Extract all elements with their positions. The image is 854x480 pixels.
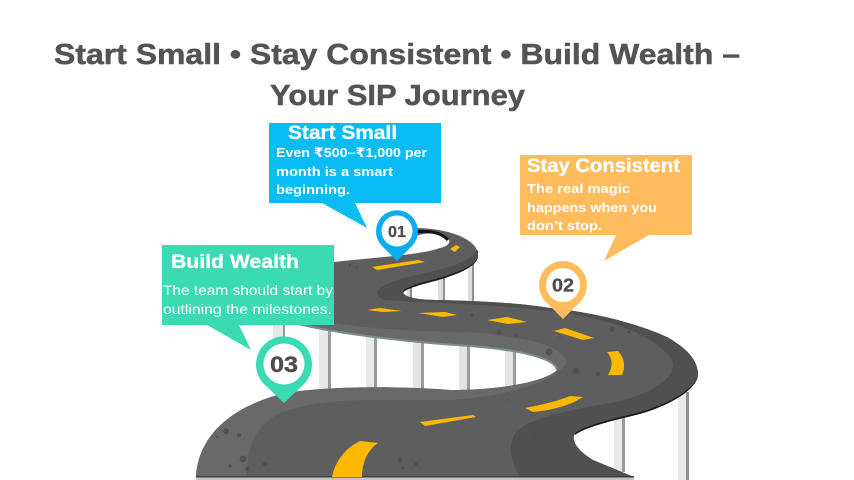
pin 03 [256, 336, 312, 403]
pin 02 [539, 261, 587, 319]
title: Your SIP Journey [270, 80, 525, 112]
callout: stay consistent [520, 155, 692, 261]
pin 01 [376, 210, 418, 261]
infographic canvas [54, 42, 740, 480]
callout: start small: Start Small [288, 123, 397, 144]
asphalt specks [216, 264, 631, 471]
callout: build wealth: Build Wealth [171, 252, 299, 273]
title [54, 39, 740, 112]
callout: stay consistent: Stay Consistent [527, 156, 681, 177]
road base line [196, 476, 634, 480]
callout: start small: beginning. [276, 182, 350, 197]
callout: stay consistent: The real magic [527, 181, 630, 196]
pin 02: 02 [552, 276, 574, 296]
pin 01: 01 [388, 224, 406, 241]
callout: start small [269, 123, 441, 228]
winding road [190, 225, 710, 480]
callout: start small: Even ₹500–₹1,000 per [276, 145, 427, 160]
callout: stay consistent: don’t stop. [527, 218, 602, 233]
callout: build wealth [162, 245, 334, 350]
callout: build wealth: outlining the milestones. [163, 301, 332, 317]
callout: stay consistent: happens when you [527, 200, 657, 215]
pin 03: 03 [270, 352, 298, 377]
yellow lane dashes [332, 245, 624, 477]
callout: start small: month is a smart [276, 164, 394, 179]
road support pillars [273, 262, 689, 480]
title: Start Small • Stay Consistent • Build Wealth – [54, 39, 740, 71]
callout: build wealth: The team should start by [163, 282, 333, 298]
